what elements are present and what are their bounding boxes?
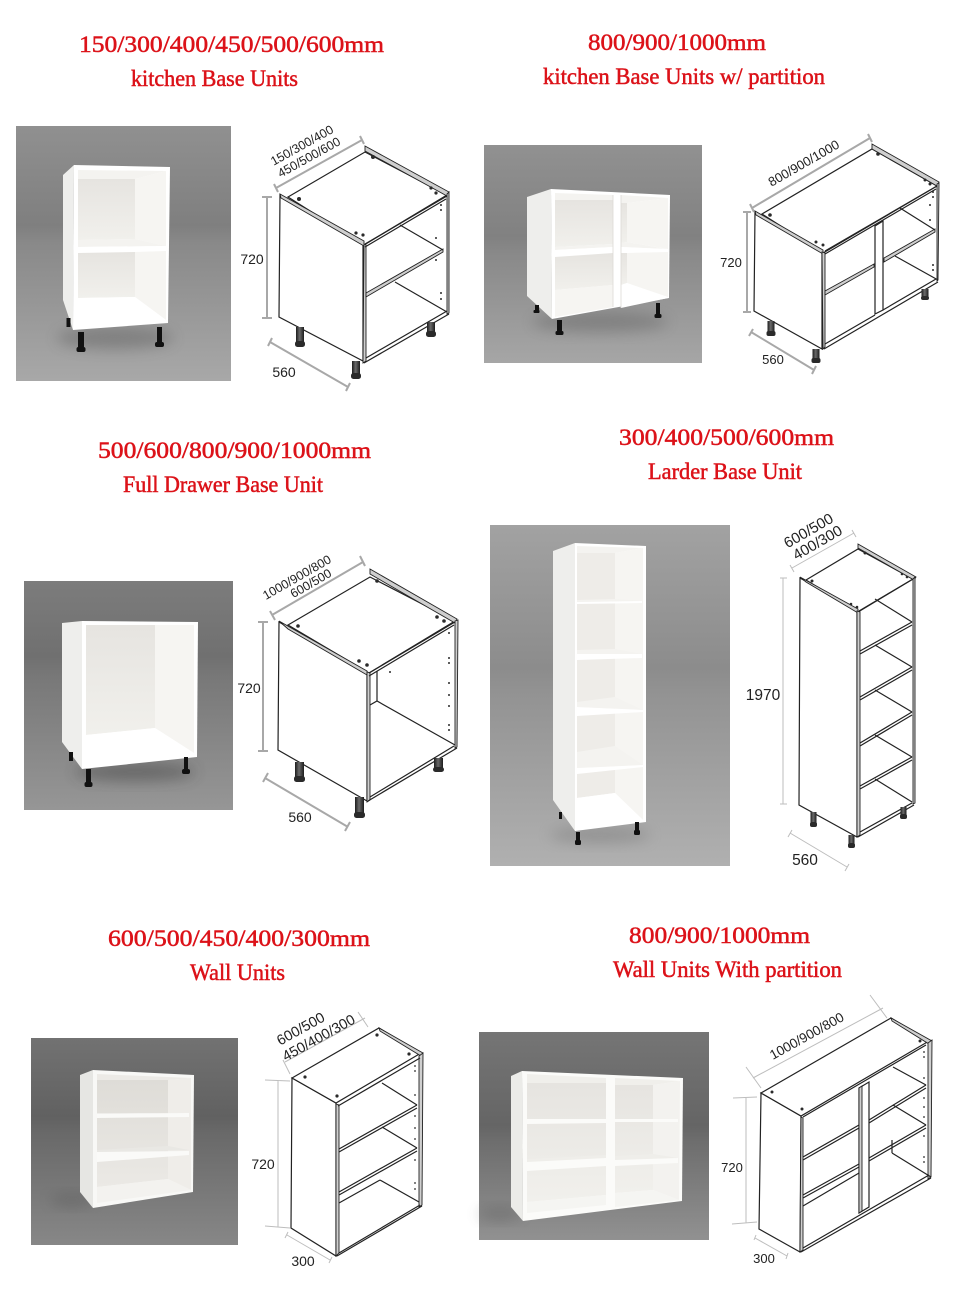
title: wall units with partition: Wall Units With partition bbox=[613, 957, 842, 982]
dimension: width: 450/400/300 bbox=[280, 1012, 358, 1065]
dimension: width: 600/500 bbox=[288, 566, 334, 601]
dimension: depth 560: 560 bbox=[272, 364, 296, 380]
photo: full drawer unit render bbox=[24, 581, 233, 810]
dimension: height 720 bbox=[240, 197, 272, 318]
dimension: width: 400/300 bbox=[790, 522, 845, 564]
technical drawing: partition base unit bbox=[720, 134, 939, 374]
dimension: height 720 bbox=[237, 622, 268, 751]
title: base units with partition bbox=[543, 30, 825, 89]
panel: kitchen base units bbox=[16, 32, 449, 391]
dimension: depth 560: 560 bbox=[288, 809, 312, 825]
dimension: width: 600/500 bbox=[781, 510, 836, 552]
title: full drawer base unit: 500/600/800/900/1000mm bbox=[98, 438, 371, 463]
title: base units with partition: 800/900/1000mm bbox=[588, 30, 766, 55]
title: larder base unit bbox=[619, 425, 834, 484]
dimension: depth 560: 560 bbox=[762, 352, 784, 367]
dimension: depth 560 bbox=[749, 329, 816, 374]
title: base units with partition: kitchen Base Units w/ partition bbox=[543, 64, 825, 89]
dimension: height 720: 720 bbox=[720, 255, 742, 270]
title: wall units bbox=[108, 926, 370, 985]
dimension: depth 560 bbox=[788, 830, 849, 871]
dimension: width: 1000/900/800 bbox=[767, 1009, 847, 1063]
panel: wall units bbox=[31, 926, 423, 1269]
panel: larder base unit bbox=[490, 425, 916, 871]
photo: larder unit render bbox=[490, 525, 730, 866]
dimension: depth 300: 300 bbox=[753, 1251, 775, 1266]
title: wall units with partition bbox=[613, 923, 842, 982]
dimension: width: 1000/900/800 bbox=[260, 552, 334, 603]
panel: kitchen base units with partition bbox=[484, 30, 939, 374]
photo: partition wall unit render bbox=[478, 1032, 709, 1240]
dimension: depth 560: 560 bbox=[792, 852, 818, 869]
dimension: height 720: 720 bbox=[237, 680, 261, 696]
dimension: width bbox=[781, 510, 856, 572]
title: kitchen base units: 150/300/400/450/500/600mm bbox=[79, 32, 384, 57]
dimension: depth 560 bbox=[263, 773, 350, 831]
technical drawing: wall unit bbox=[251, 1010, 423, 1269]
title: kitchen base units: kitchen Base Units bbox=[131, 66, 298, 91]
title: kitchen base units bbox=[79, 32, 384, 91]
dimension: width: 450/500/600 bbox=[275, 135, 343, 180]
dimension: depth 560 bbox=[268, 338, 350, 391]
title: larder base unit: Larder Base Unit bbox=[648, 459, 803, 484]
dimension: width bbox=[260, 552, 365, 620]
dimension: width bbox=[268, 123, 364, 192]
dimension: height 720: 720 bbox=[721, 1160, 743, 1175]
technical drawing: full drawer unit bbox=[237, 552, 458, 831]
photo: base unit render bbox=[16, 126, 231, 381]
dimension: height 720: 720 bbox=[240, 251, 264, 267]
dimension: height 720 bbox=[721, 1097, 757, 1224]
technical drawing: partition wall unit bbox=[721, 995, 932, 1266]
dimension: height 720: 720 bbox=[251, 1156, 275, 1172]
dimension: height 1970 bbox=[746, 578, 787, 804]
technical drawing: larder unit bbox=[746, 510, 916, 871]
panel: full drawer base unit bbox=[24, 438, 458, 831]
title: wall units: 600/500/450/400/300mm bbox=[108, 926, 370, 951]
dimension: depth 300: 300 bbox=[291, 1253, 315, 1269]
title: larder base unit: 300/400/500/600mm bbox=[619, 425, 834, 450]
dimension: width: 600/500 bbox=[274, 1010, 328, 1049]
dimension: width bbox=[746, 995, 887, 1088]
dimension: depth 300 bbox=[285, 1232, 332, 1269]
title: wall units: Wall Units bbox=[190, 960, 285, 985]
dimension: height 1970: 1970 bbox=[746, 687, 781, 704]
title: full drawer base unit bbox=[98, 438, 371, 497]
dimension: height 720 bbox=[251, 1080, 290, 1228]
technical drawing: base unit bbox=[240, 123, 449, 391]
dimension: width: 150/300/400 bbox=[268, 123, 336, 168]
dimension: height 720 bbox=[720, 212, 751, 312]
dimension: width bbox=[750, 134, 872, 212]
dimension: depth 300 bbox=[753, 1235, 788, 1266]
photo: partition base unit render bbox=[484, 145, 702, 363]
photo: wall unit render bbox=[31, 1038, 238, 1245]
title: wall units with partition: 800/900/1000mm bbox=[629, 923, 810, 948]
title: full drawer base unit: Full Drawer Base Unit bbox=[123, 472, 324, 497]
dimension: width: 800/900/1000 bbox=[766, 137, 842, 189]
panel: wall units with partition bbox=[478, 923, 932, 1266]
dimension: width bbox=[274, 1010, 368, 1074]
